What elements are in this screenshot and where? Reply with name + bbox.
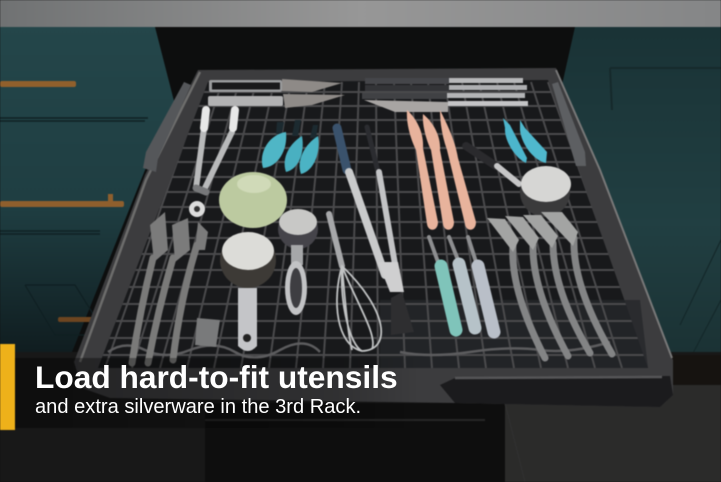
peach servers bbox=[407, 110, 476, 230]
rim highlights bbox=[80, 72, 200, 362]
knives top right bbox=[362, 78, 528, 112]
front rail bbox=[440, 376, 673, 407]
countertop bbox=[0, 0, 721, 27]
small tongs bbox=[196, 110, 235, 192]
floor below rack bbox=[0, 352, 721, 482]
teal scoops right bbox=[503, 118, 547, 163]
peeler tool bbox=[466, 146, 519, 184]
rack frame bbox=[74, 68, 673, 407]
spoons right bbox=[513, 238, 612, 358]
right cabinets bbox=[562, 27, 721, 355]
side rails bbox=[143, 82, 191, 172]
rack wire grid bbox=[90, 82, 660, 368]
knives top left bbox=[208, 79, 345, 108]
whisk bbox=[329, 214, 381, 351]
long tongs bbox=[337, 127, 396, 275]
caption heading: Load hard-to-fit utensils bbox=[35, 359, 398, 395]
green bowl bbox=[219, 172, 287, 228]
caption subheading: and extra silverware in the 3rd Rack. bbox=[35, 396, 361, 418]
accent bar bbox=[0, 344, 15, 430]
forks left bbox=[132, 245, 197, 363]
fork heads bbox=[150, 201, 220, 347]
tong head bbox=[378, 262, 414, 335]
caption shadow bbox=[0, 358, 420, 428]
spreaders bbox=[429, 237, 494, 332]
spoon bowls bbox=[487, 212, 578, 252]
left cabinets bbox=[0, 27, 175, 352]
small measuring cup with ring handle bbox=[278, 209, 318, 315]
measuring cup bbox=[220, 232, 276, 351]
small cup right bbox=[520, 166, 571, 217]
teal scoops left bbox=[262, 120, 319, 174]
